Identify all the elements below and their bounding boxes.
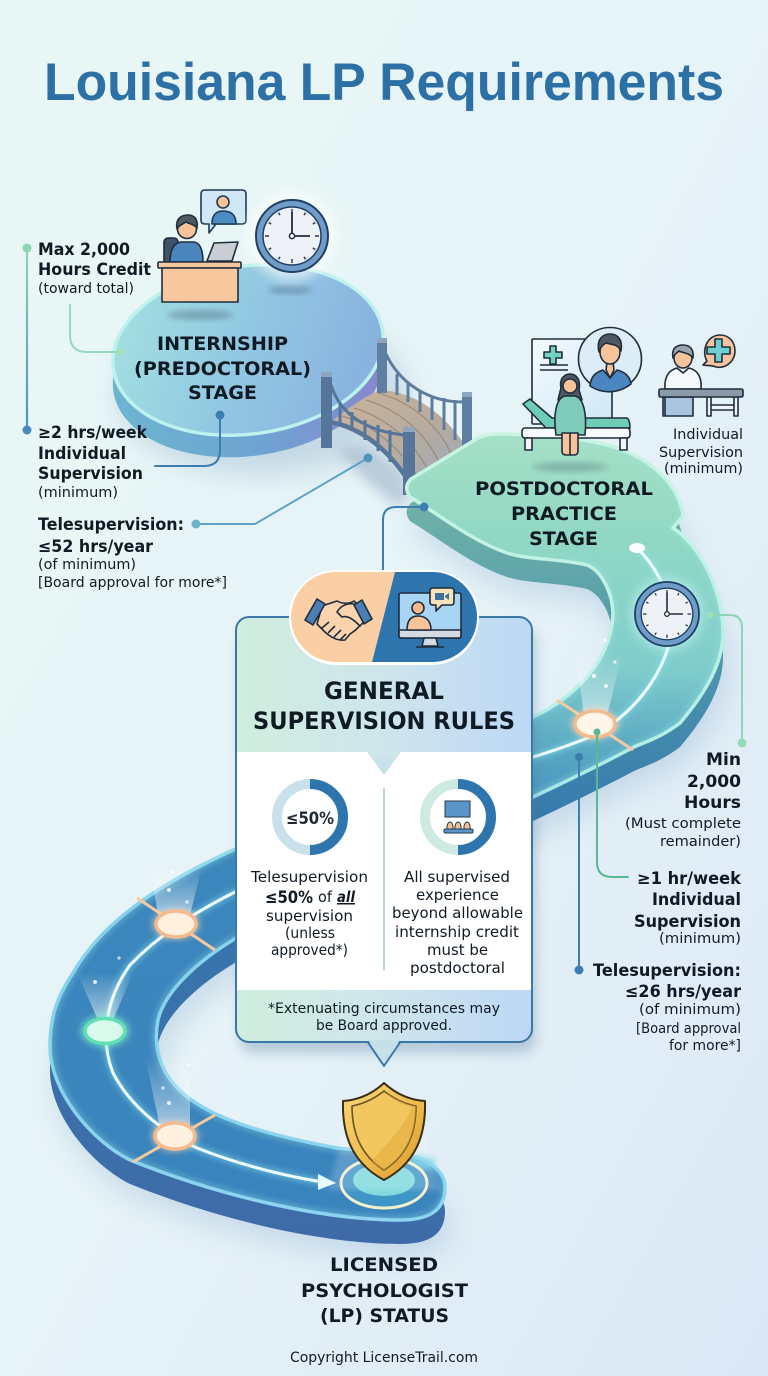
icon: video call bubble [201,190,246,233]
text: internship individual supervision [38,423,148,501]
panel shadow [240,628,536,1053]
leader: road to telesupervision [578,757,580,970]
text: postdoctoral individual supervision: Individual [652,890,741,909]
text: internship telesupervision: [Board approval for more*] [38,575,227,591]
text: minimum hours: remainder) [660,834,741,850]
stage label: internship: INTERNSHIP [157,333,288,355]
final status label: PSYCHOLOGIST [301,1280,468,1302]
text: internship individual supervision: Supervision [38,464,143,483]
stage label: internship [134,333,311,404]
text: postdoctoral telesupervision: ≤26 hrs/year [625,982,742,1001]
icon: gold shield [328,1083,440,1190]
leader: clock to min hours [710,615,742,743]
icon: classroom [444,801,473,833]
text: postdoctoral icon caption [659,427,743,477]
road centre light line with arrow [106,543,672,1190]
text: postdoctoral icon caption: Supervision [659,445,743,461]
icon pill: handshake and video [289,570,479,665]
text: postdoctoral icon caption: Individual [673,427,743,443]
text: postdoctoral experience rule: postdoctoral [410,959,505,977]
text: postdoctoral telesupervision: Telesupervision: [593,961,741,980]
text: telesupervision rule: (unless [285,924,335,942]
donut: 50 percent telesupervision: ≤50% [286,809,334,829]
milestone node: upper right [557,638,633,750]
road rim [50,434,723,1220]
target ring at end of road [341,1155,436,1208]
text: internship hours credit: Hours Credit [38,260,151,279]
panel border [236,617,532,1042]
milestone node: green [77,956,133,1048]
final status label [301,1254,468,1327]
text: internship telesupervision: Telesupervision: [38,515,184,534]
icon: handshake [305,599,372,640]
bridge deck [329,390,465,488]
road top surface [50,434,723,1220]
copyright: Copyright LicenseTrail.com [290,1350,478,1366]
text: postdoctoral experience rule: beyond allowable [392,904,523,922]
header notch [367,752,401,775]
text: internship hours credit: (toward total) [38,281,134,297]
text: telesupervision rule: Telesupervision [250,868,368,886]
leader: supervision to internship [155,415,220,466]
milestone node: left lower [133,1057,215,1162]
text: postdoctoral telesupervision: for more*] [669,1038,741,1054]
front rail [328,422,408,480]
text: postdoctoral experience rule [392,868,523,977]
text: footnote: *Extenuating circumstances may [268,1001,500,1017]
text: telesupervision rule [250,868,368,959]
internship disc shadow [117,315,407,475]
text: minimum hours: Hours [684,793,741,812]
text: internship individual supervision: Individual [38,444,126,463]
icon: desk with person at laptop [158,215,241,302]
text: postdoctoral individual supervision: (minimum) [659,931,741,947]
panel heading [253,677,515,735]
leader: telesupervision to bridge [196,458,368,524]
icon: doctor at table with medical bubble [659,335,743,416]
text: telesupervision rule: ≤50% [265,888,313,908]
icon: patient on bed with doctor [522,328,642,455]
text: internship telesupervision [38,515,227,591]
donut: classroom supervision [425,784,491,850]
stage label: postdoctoral: STAGE [529,528,598,550]
disc top [102,248,394,452]
panel heading: GENERAL [324,677,444,705]
milestone node: left upper [137,867,215,950]
postdoctoral platform tip overlay [404,436,608,575]
road shadow [56,472,729,1258]
text: footnote [268,1001,500,1034]
text: postdoctoral telesupervision: [Board approval [636,1021,741,1037]
donut: 50 percent telesupervision [277,784,343,850]
text: postdoctoral experience rule: All supervised [404,868,510,886]
column divider [383,788,385,970]
text: postdoctoral telesupervision: (of minimum) [639,1002,741,1018]
text: postdoctoral experience rule: internship credit [395,923,519,941]
text: postdoctoral telesupervision [593,961,742,1054]
bottom pointer [367,1041,401,1066]
back rail [385,352,463,402]
final status label: LICENSED [330,1254,438,1276]
text: postdoctoral experience rule: experience [416,886,499,904]
text: internship telesupervision: (of minimum) [38,557,136,573]
text: internship hours credit: Max 2,000 [38,240,130,259]
text: minimum hours: (Must complete [625,816,741,832]
road side wall [50,458,723,1244]
white body [236,752,532,990]
text: postdoctoral individual supervision: Supervision [634,912,741,931]
internship platform [102,248,394,474]
text: postdoctoral individual supervision [634,869,742,947]
text: minimum hours: Min [706,750,741,769]
text: telesupervision rule: all [337,888,356,906]
disc side [102,270,394,474]
bridge [321,338,472,505]
stage label: internship: (PREDOCTORAL) [134,358,311,380]
leader: node to individual supervision [597,732,628,877]
front posts [321,372,332,448]
header band [236,617,532,752]
text: internship telesupervision: ≤52 hrs/year [38,537,154,556]
icon: wall clock [248,192,336,280]
leader: credit to internship [70,305,120,352]
panel heading: SUPERVISION RULES [253,707,515,735]
text: minimum hours [625,750,741,850]
text: internship hours credit [38,240,151,297]
text: postdoctoral icon caption: (minimum) [664,461,743,477]
text: postdoctoral individual supervision: ≥1 hr/week [637,869,742,888]
icon: monitor with video call [399,588,461,647]
text: footnote: be Board approved. [316,1018,452,1034]
text: minimum hours: 2,000 [687,772,741,791]
text: telesupervision rule: supervision [266,907,353,925]
leader lines [22,244,746,974]
back posts [377,338,387,393]
stage label: postdoctoral [475,478,653,550]
text: telesupervision rule: of [318,888,333,906]
text: internship individual supervision: ≥2 hrs/week [38,423,148,442]
stage label: postdoctoral: PRACTICE [511,503,617,525]
footer band [236,990,532,1042]
leader: panel to postdoctoral [383,507,424,572]
title: Louisiana LP Requirements [44,53,724,112]
text: internship individual supervision: (minimum) [38,485,118,501]
text: telesupervision rule: approved*) [271,941,348,959]
panel: general supervision rules [236,617,536,1066]
text: postdoctoral experience rule: must be [427,941,488,959]
road and postdoctoral platform [50,434,723,1244]
arrow head [318,1174,336,1190]
final status label: (LP) STATUS [320,1305,449,1327]
leader: hours to hours vertical [26,248,28,430]
road clock [631,578,703,650]
stage label: postdoctoral: POSTDOCTORAL [475,478,653,500]
stage label: internship: STAGE [188,382,257,404]
